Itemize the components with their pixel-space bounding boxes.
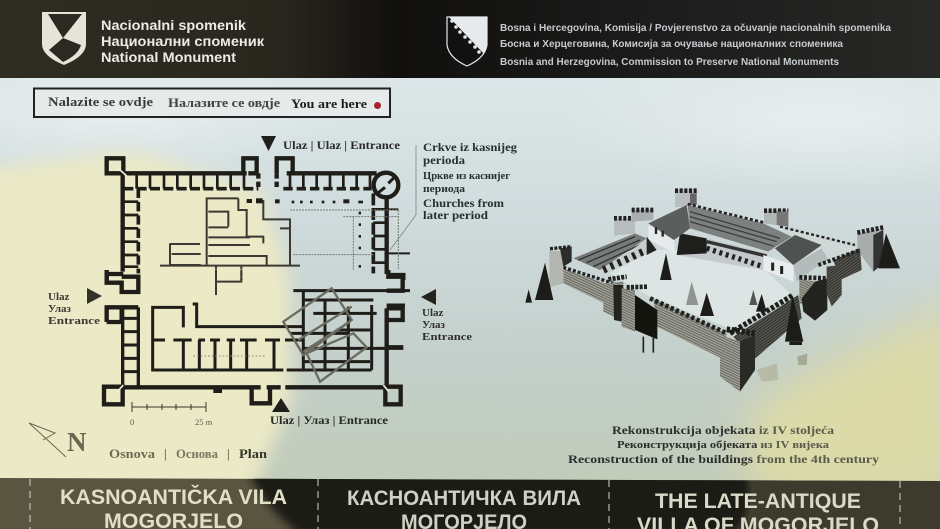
left house (648, 225, 675, 253)
title: Serbian: КАСНОАНТИЧКА ВИЛА (347, 487, 581, 510)
icon: north arrow: N (67, 427, 87, 457)
label: west entrance: Улаз (48, 303, 72, 315)
label: west entrance (48, 291, 100, 327)
text: commission (500, 23, 891, 68)
legend: you are here: Nalazite se ovdje (48, 95, 154, 109)
left wing (573, 233, 647, 270)
caption: reconstruction: Реконструкција објеката из IV вијека (617, 439, 830, 451)
label: west entrance: Entrance (48, 315, 100, 327)
legend: you are here (34, 88, 390, 117)
illustration: reconstruction of the villa (525, 188, 900, 392)
label: west entrance: Ulaz (48, 291, 70, 303)
front left gate towers (603, 282, 623, 322)
callout: churches from later period: периода (423, 184, 466, 195)
text: national monument: Nacionalni spomenik (101, 17, 246, 33)
scale bar (130, 402, 213, 427)
label: plan: Основа (176, 447, 219, 461)
text: commission: Босна и Херцеговина, Комисија за очување националних споменика (500, 39, 843, 50)
label: plan: Osnova (109, 447, 156, 461)
callout: churches from later period: later period (423, 210, 489, 222)
callout: churches from later period: Crkve iz kasnijeg (423, 142, 517, 154)
text: national monument (101, 17, 265, 65)
front right wall (733, 295, 802, 360)
caption: reconstruction: Reconstruction of the buildings from the 4th century (568, 452, 879, 466)
icon: red dot (374, 102, 381, 109)
label: plan: | (164, 447, 167, 461)
label: plan (109, 447, 267, 461)
text: commission: Bosna i Hercegovina, Komisija / Povjerenstvo za očuvanje nacionalnih spomenika (500, 23, 891, 34)
callout: churches from later period: Churches from (423, 198, 504, 210)
plan: southern half (104, 270, 410, 404)
caption: reconstruction (568, 425, 879, 466)
icon: Bosnia and Herzegovina coat of arms (447, 17, 487, 66)
legend: you are here: Налазите се овдје (168, 96, 281, 110)
arrow: east entrance (421, 289, 436, 305)
back towers (614, 188, 883, 272)
title: Serbian (347, 487, 581, 529)
label: plan: Plan (239, 447, 267, 461)
text: national monument: National Monument (101, 49, 236, 65)
label: south entrance: Ulaz | Улаз | Entrance (270, 415, 388, 427)
title: English: THE LATE-ANTIQUE (655, 490, 861, 513)
title: Bosnian (60, 485, 287, 529)
label: east entrance: Улаз (422, 319, 446, 331)
scale bar: 0 (130, 417, 134, 427)
callout: churches from later period (390, 142, 517, 250)
title: Bosnian: KASNOANTIČKA VILA (60, 485, 287, 509)
arrow: north entrance (261, 136, 276, 151)
callout: churches from later period: perioda (423, 155, 465, 167)
label: east entrance: Entrance (422, 331, 472, 343)
legend: you are here: You are here (291, 97, 367, 111)
courtyard (610, 248, 790, 330)
icon: north arrow (29, 423, 87, 457)
colonnade (677, 232, 768, 270)
plan: northern half (107, 158, 410, 280)
panel: footer band (0, 478, 940, 529)
chart: site plan (104, 158, 410, 404)
left tower (549, 250, 563, 287)
right house (763, 255, 793, 282)
panel: header band (0, 0, 940, 78)
label: east entrance: Ulaz (422, 307, 444, 319)
label: plan: | (227, 447, 230, 461)
arrow: south entrance (272, 398, 290, 412)
text: national monument: Национални споменик (101, 33, 265, 49)
text: commission: Bosnia and Herzegovina, Commission to Preserve National Monuments (500, 57, 839, 68)
icon: national monument shield (42, 12, 86, 65)
trees (525, 233, 900, 345)
arrow: west entrance (87, 288, 102, 304)
label: north entrance: Ulaz | Ulaz | Entrance (283, 140, 400, 152)
label: east entrance (422, 307, 472, 343)
back right wall (780, 227, 858, 257)
scale bar: 25 m (195, 417, 213, 427)
title: English (637, 490, 879, 529)
front left wall (563, 268, 610, 305)
front corner tower (720, 335, 740, 392)
callout: churches from later period: Цркве из каснијег (423, 171, 510, 182)
roof: long back range (688, 205, 792, 252)
caption: reconstruction: Rekonstrukcija objekata iz IV stoljeća (612, 425, 834, 437)
right towers (799, 278, 815, 310)
